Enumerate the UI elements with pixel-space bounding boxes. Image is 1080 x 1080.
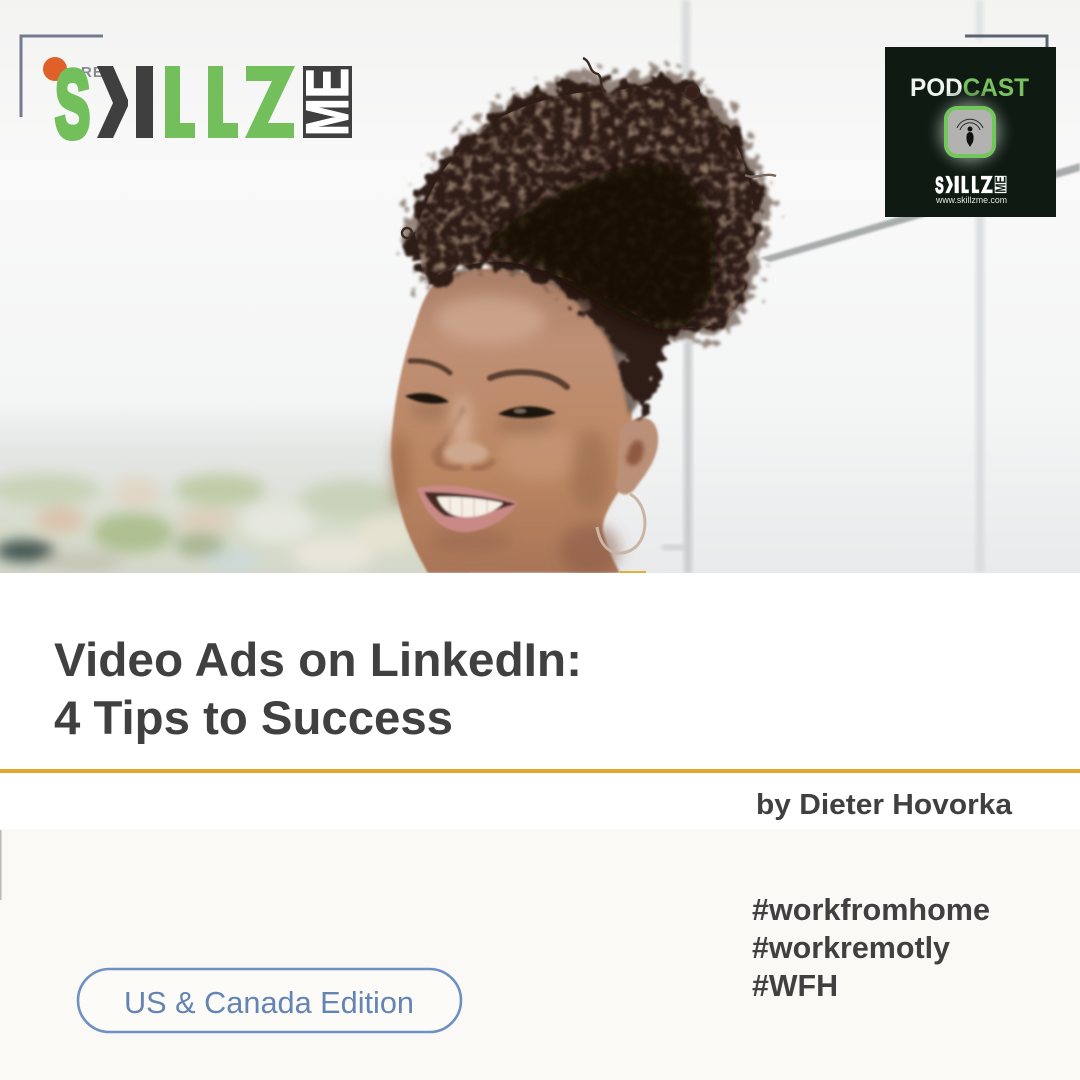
podcast badge bbox=[885, 47, 1056, 217]
hashtags: #workremotly bbox=[752, 931, 950, 965]
photo background: blurred window bbox=[0, 0, 1080, 573]
title bbox=[54, 634, 582, 745]
logo letters ILLZ bbox=[136, 66, 295, 138]
main hair mass bbox=[408, 80, 761, 418]
logo ME box: ME bbox=[294, 68, 361, 136]
edition pill bbox=[78, 969, 461, 1032]
hashtags: #WFH bbox=[752, 969, 838, 1003]
badge logo: ME bbox=[994, 176, 1010, 193]
hashtags bbox=[752, 893, 990, 1003]
REC label: REC bbox=[81, 64, 116, 81]
logo: SkillzME bbox=[55, 51, 361, 158]
logo chevron K bbox=[97, 66, 128, 138]
hair bun bbox=[402, 58, 776, 418]
face shading bbox=[391, 296, 620, 576]
badge title: PODCAST bbox=[910, 74, 1029, 102]
nose bbox=[432, 405, 494, 469]
lower panel bbox=[0, 829, 1080, 1080]
viewfinder bracket left bbox=[21, 36, 103, 117]
smile bbox=[417, 486, 518, 532]
badge url: www.skillzme.com bbox=[935, 195, 1007, 206]
temple hair bbox=[560, 288, 668, 415]
yellow top bbox=[620, 571, 646, 573]
author byline: by Dieter Hovorka bbox=[756, 789, 1013, 821]
ear bbox=[616, 418, 658, 494]
badge glow bbox=[924, 86, 1016, 178]
hair texture bbox=[415, 86, 755, 330]
recording frame overlay bbox=[21, 36, 1047, 117]
edition pill: US & Canada Edition bbox=[124, 985, 414, 1020]
eyebrows bbox=[410, 361, 567, 387]
viewfinder bracket right bbox=[965, 36, 1047, 48]
title: Video Ads on LinkedIn: bbox=[54, 634, 582, 687]
badge logo: S bbox=[935, 172, 944, 198]
hashtags: #workfromhome bbox=[752, 893, 990, 927]
woman portrait bbox=[391, 58, 776, 576]
gold divider bbox=[0, 769, 1080, 773]
badge logo bbox=[935, 172, 1010, 198]
podcast icon bbox=[946, 108, 994, 156]
face and neck bbox=[391, 269, 632, 573]
dark core of bun bbox=[480, 161, 718, 329]
eyes bbox=[405, 393, 556, 418]
title: 4 Tips to Success bbox=[54, 692, 453, 745]
hero photo bbox=[0, 0, 1080, 576]
record dot bbox=[43, 57, 67, 81]
stray curls bbox=[402, 58, 776, 238]
hoop earring bbox=[597, 494, 645, 553]
logo letter S: S bbox=[55, 51, 90, 158]
wispy outer hair bbox=[404, 72, 771, 340]
blurred city skyline bbox=[0, 429, 470, 573]
